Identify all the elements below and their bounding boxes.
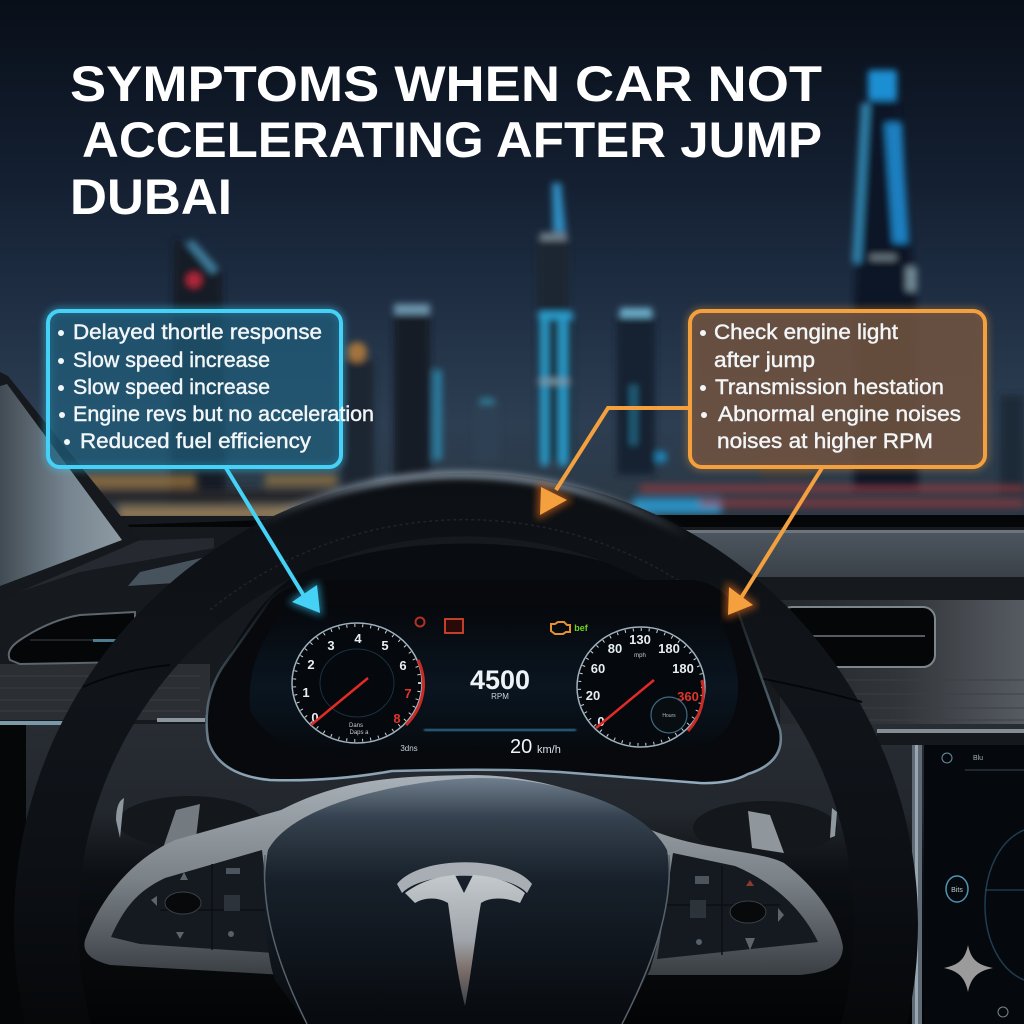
tachometer [292, 623, 423, 743]
tachometer: 5 [381, 638, 389, 653]
speedometer: 180 [672, 661, 694, 676]
tachometer: 7 [404, 686, 412, 701]
Dubai skyline [56, 70, 1024, 520]
speedometer: 180 [658, 641, 680, 656]
callout: cyan symptoms: Engine revs but no acceleration [73, 403, 374, 426]
tachometer: 6 [399, 658, 407, 673]
callout: cyan symptoms: Delayed thortle response [73, 321, 322, 344]
arrow: to steering wheel top [540, 408, 690, 515]
centre RPM readout: 4500 [470, 665, 530, 695]
centre touchscreen: Bits [951, 887, 963, 894]
air vent left [9, 612, 135, 664]
callout: orange symptoms: Abnormal engine noises [718, 403, 961, 426]
callout: cyan symptoms: Reduced fuel efficiency [80, 430, 312, 453]
centre RPM readout: km/h [537, 744, 561, 756]
callout: orange symptoms: Transmission hestation [715, 376, 944, 399]
centre RPM readout: 20 [510, 736, 532, 758]
tachometer: Dans [349, 723, 363, 729]
cluster bezel [207, 580, 781, 783]
callout: cyan symptoms: Slow speed increase [73, 349, 270, 372]
hub edge highlights [264, 855, 669, 1024]
tachometer: Daps a [349, 730, 369, 736]
dashboard [0, 372, 1024, 1024]
centre RPM readout: RPM [491, 692, 509, 701]
centre touchscreen: Blu [973, 755, 983, 762]
arrow: to tachometer [226, 468, 320, 613]
title: DUBAI [70, 169, 232, 225]
warning icons: bef [574, 623, 589, 633]
tachometer: 2 [307, 657, 315, 672]
tachometer: 0 [311, 710, 319, 725]
speedometer: mph [634, 653, 646, 659]
dash top surface left [0, 538, 214, 598]
speedometer: 130 [629, 632, 651, 647]
wood panel right [780, 600, 1024, 728]
night sky [0, 0, 1024, 530]
A pillar [0, 372, 140, 600]
cluster screen [250, 604, 738, 756]
lower dash [0, 724, 1024, 1024]
centre RPM readout: 3dns [400, 744, 418, 753]
callout: orange symptoms: Check engine light [714, 321, 898, 344]
dash top surface right [640, 533, 1024, 577]
Tesla logo [397, 862, 532, 1006]
tachometer: 4 [354, 631, 362, 646]
speedometer: 360 [677, 689, 699, 704]
wood panel left [0, 664, 210, 720]
callout: orange symptoms: after jump [714, 349, 815, 372]
airbag hub [265, 778, 669, 1024]
title: SYMPTOMS WHEN CAR NOT [70, 56, 822, 112]
dash trim [0, 721, 63, 725]
speedometer [577, 627, 705, 747]
steering paddles and stalks [116, 796, 837, 855]
warning icons [416, 618, 589, 634]
right button pad [657, 853, 818, 959]
speedometer: 20 [586, 688, 600, 703]
speedometer: 80 [608, 641, 622, 656]
tachometer: 1 [302, 685, 310, 700]
title: ACCELERATING AFTER JUMP [82, 112, 822, 168]
left button pad [111, 850, 274, 953]
steering wheel spokes [84, 775, 843, 985]
steering wheel rim [14, 473, 918, 1024]
arrow: to speedometer [728, 468, 822, 615]
windscreen lower edge [120, 510, 1024, 527]
callout: orange symptoms [690, 311, 985, 467]
callout: orange symptoms: noises at higher RPM [717, 430, 933, 453]
tachometer: 3 [327, 638, 335, 653]
instrument hood [205, 544, 778, 728]
centre touchscreen [912, 745, 1024, 1024]
instrument cluster [207, 580, 781, 783]
speedometer: Hours [662, 713, 676, 719]
speedometer: 0 [597, 714, 605, 729]
tachometer: 8 [393, 711, 401, 726]
callout: cyan symptoms [48, 311, 374, 467]
title [70, 56, 822, 225]
callout: cyan symptoms: Slow speed increase [73, 376, 270, 399]
centre RPM readout [400, 665, 576, 758]
sparkle mark [944, 945, 993, 992]
speedometer: 60 [591, 661, 605, 676]
air vent right [780, 607, 935, 667]
